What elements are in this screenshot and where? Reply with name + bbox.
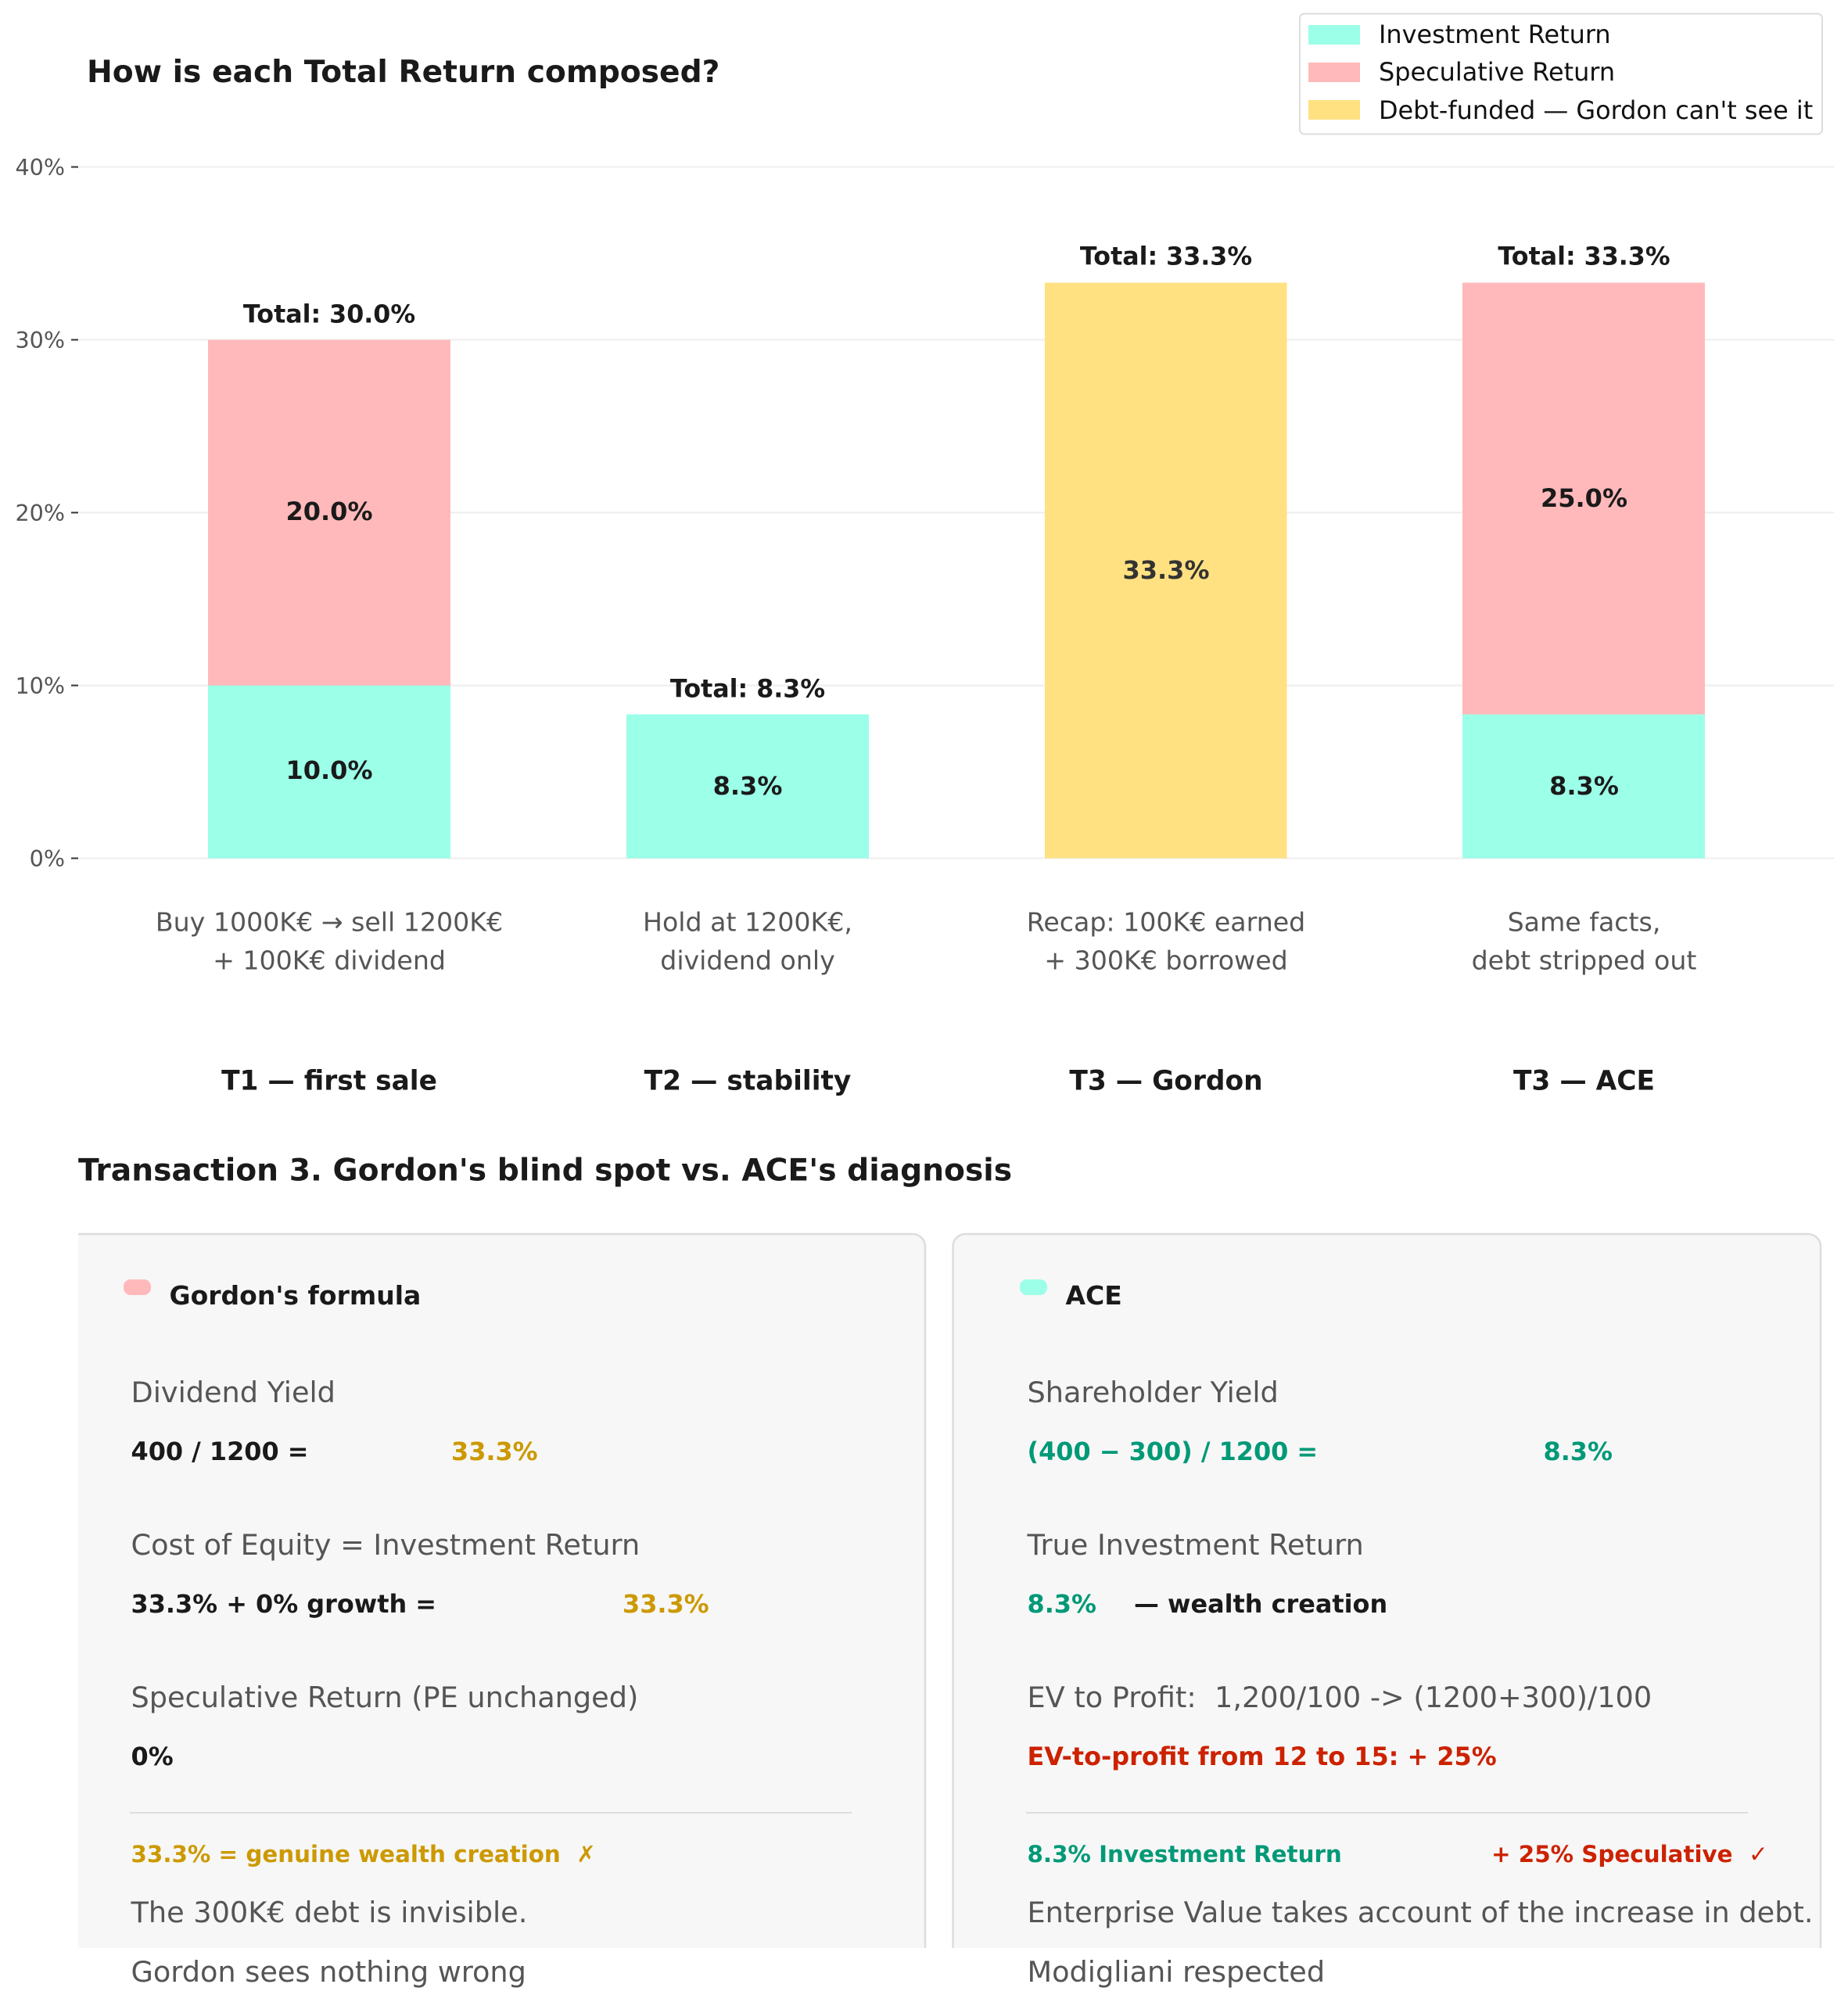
x label: T1: Buy 1000K€ → sell 1200K€ [156,907,503,937]
chart title: How is each Total Return composed? [87,55,719,90]
row: true investment return: True Investment Return [1026,1528,1364,1562]
note [130,1896,527,1989]
panel: Gordon's formula [78,1234,925,1989]
panel heading with dot [1020,1279,1122,1311]
y axis with gridlines: 20% [15,500,65,526]
x label: T3 ACE [1472,907,1696,1096]
row: shareholder yield: Shareholder Yield [1028,1376,1279,1409]
x label: T2: T2 — stability [644,1065,851,1096]
y axis with gridlines [15,154,1834,872]
note [1028,1896,1813,1989]
legend: Investment Return [1379,20,1611,49]
bar: T1 first sale [208,300,450,859]
x label: T2: Hold at 1200K€, [643,907,852,937]
legend: Speculative Return [1379,57,1615,87]
row: dividend yield: Dividend Yield [131,1376,336,1409]
bar: T1 first sale: Total: 30.0% [243,300,415,328]
row: shareholder yield: 8.3% [1544,1437,1613,1466]
row: cost of equity: 33.3% [623,1589,709,1619]
bar: T3 Gordon [1045,242,1287,859]
x label: T3 ACE: T3 — ACE [1513,1065,1655,1096]
legend [1300,14,1822,135]
bar: T2 stability [626,676,869,859]
row: shareholder yield: (400 − 300) / 1200 = [1028,1437,1318,1466]
row: true investment return: 8.3% [1028,1589,1096,1619]
x label: T3 Gordon: T3 — Gordon [1069,1065,1263,1096]
x label: T3 ACE: Same facts, [1508,907,1660,937]
row: cost of equity: 33.3% + 0% growth = [131,1589,436,1619]
row: dividend yield [131,1376,538,1466]
note: Modigliani respected [1028,1955,1325,1989]
panel heading with dot: ACE [1065,1280,1122,1311]
row: EV to profit: EV-to-profit from 12 to 15: + 25% [1028,1742,1497,1771]
note: Enterprise Value takes account of the increase in debt. [1028,1896,1813,1929]
row: speculative return [131,1681,638,1771]
x label: T1: T1 — first sale [221,1065,437,1096]
verdict: 33.3% = genuine wealth creation ✗ [131,1841,596,1867]
bar: T1 first sale: 20.0% [285,497,373,526]
row: dividend yield: 33.3% [451,1437,538,1466]
legend: Debt-funded — Gordon can't see it [1379,95,1813,125]
row: true investment return [1026,1528,1387,1619]
section heading: Transaction 3. Gordon's blind spot vs. ACE's diagnosis [78,1153,1012,1189]
bar: T3 ACE: 8.3% [1549,771,1619,801]
y axis with gridlines: 40% [15,154,65,181]
x label: T3 Gordon: Recap: 100K€ earned [1027,907,1305,937]
bar: T2 stability: Total: 8.3% [670,676,825,704]
row: cost of equity: Cost of Equity = Investment Return [131,1528,640,1562]
x label: T3 Gordon [1027,907,1305,1096]
row: speculative return: Speculative Return (PE unchanged) [131,1681,638,1714]
x label: T3 ACE: debt stripped out [1472,945,1696,976]
note: The 300K€ debt is invisible. [130,1896,527,1929]
y axis with gridlines: 30% [15,327,65,353]
panel: ACE [953,1234,1821,1989]
bar: T3 ACE [1462,242,1705,859]
x label: T3 Gordon: + 300K€ borrowed [1044,945,1288,976]
row: speculative return: 0% [131,1742,174,1771]
row: EV to profit [1028,1681,1652,1771]
row: dividend yield: 400 / 1200 = [131,1437,309,1466]
x label: T1: + 100K€ dividend [213,945,446,976]
y axis with gridlines: 0% [30,845,65,872]
bar: T3 ACE: 25.0% [1541,483,1627,513]
bar: T2 stability: 8.3% [713,771,782,801]
bar: T3 Gordon: Total: 33.3% [1080,242,1252,271]
row: true investment return: — wealth creation [1134,1589,1387,1619]
row: EV to profit: EV to Profit: 1,200/100 -> (1200+300)/100 [1028,1681,1652,1714]
y axis with gridlines: 10% [15,673,65,699]
x label: T2 [643,907,852,1096]
row: shareholder yield [1028,1376,1613,1466]
x label: T1 [156,907,503,1096]
verdict: 8.3% Investment Return [1028,1841,1342,1867]
verdict [1028,1841,1768,1867]
x label: T2: dividend only [660,945,835,976]
verdict: + 25% Speculative ✓ [1491,1841,1768,1867]
row: cost of equity [131,1528,709,1619]
panel heading with dot: Gordon's formula [169,1280,421,1311]
note: Gordon sees nothing wrong [131,1955,526,1989]
bar: T3 Gordon: 33.3% [1122,555,1210,585]
bar: T3 ACE: Total: 33.3% [1498,242,1670,271]
bar: T1 first sale: 10.0% [285,755,373,785]
